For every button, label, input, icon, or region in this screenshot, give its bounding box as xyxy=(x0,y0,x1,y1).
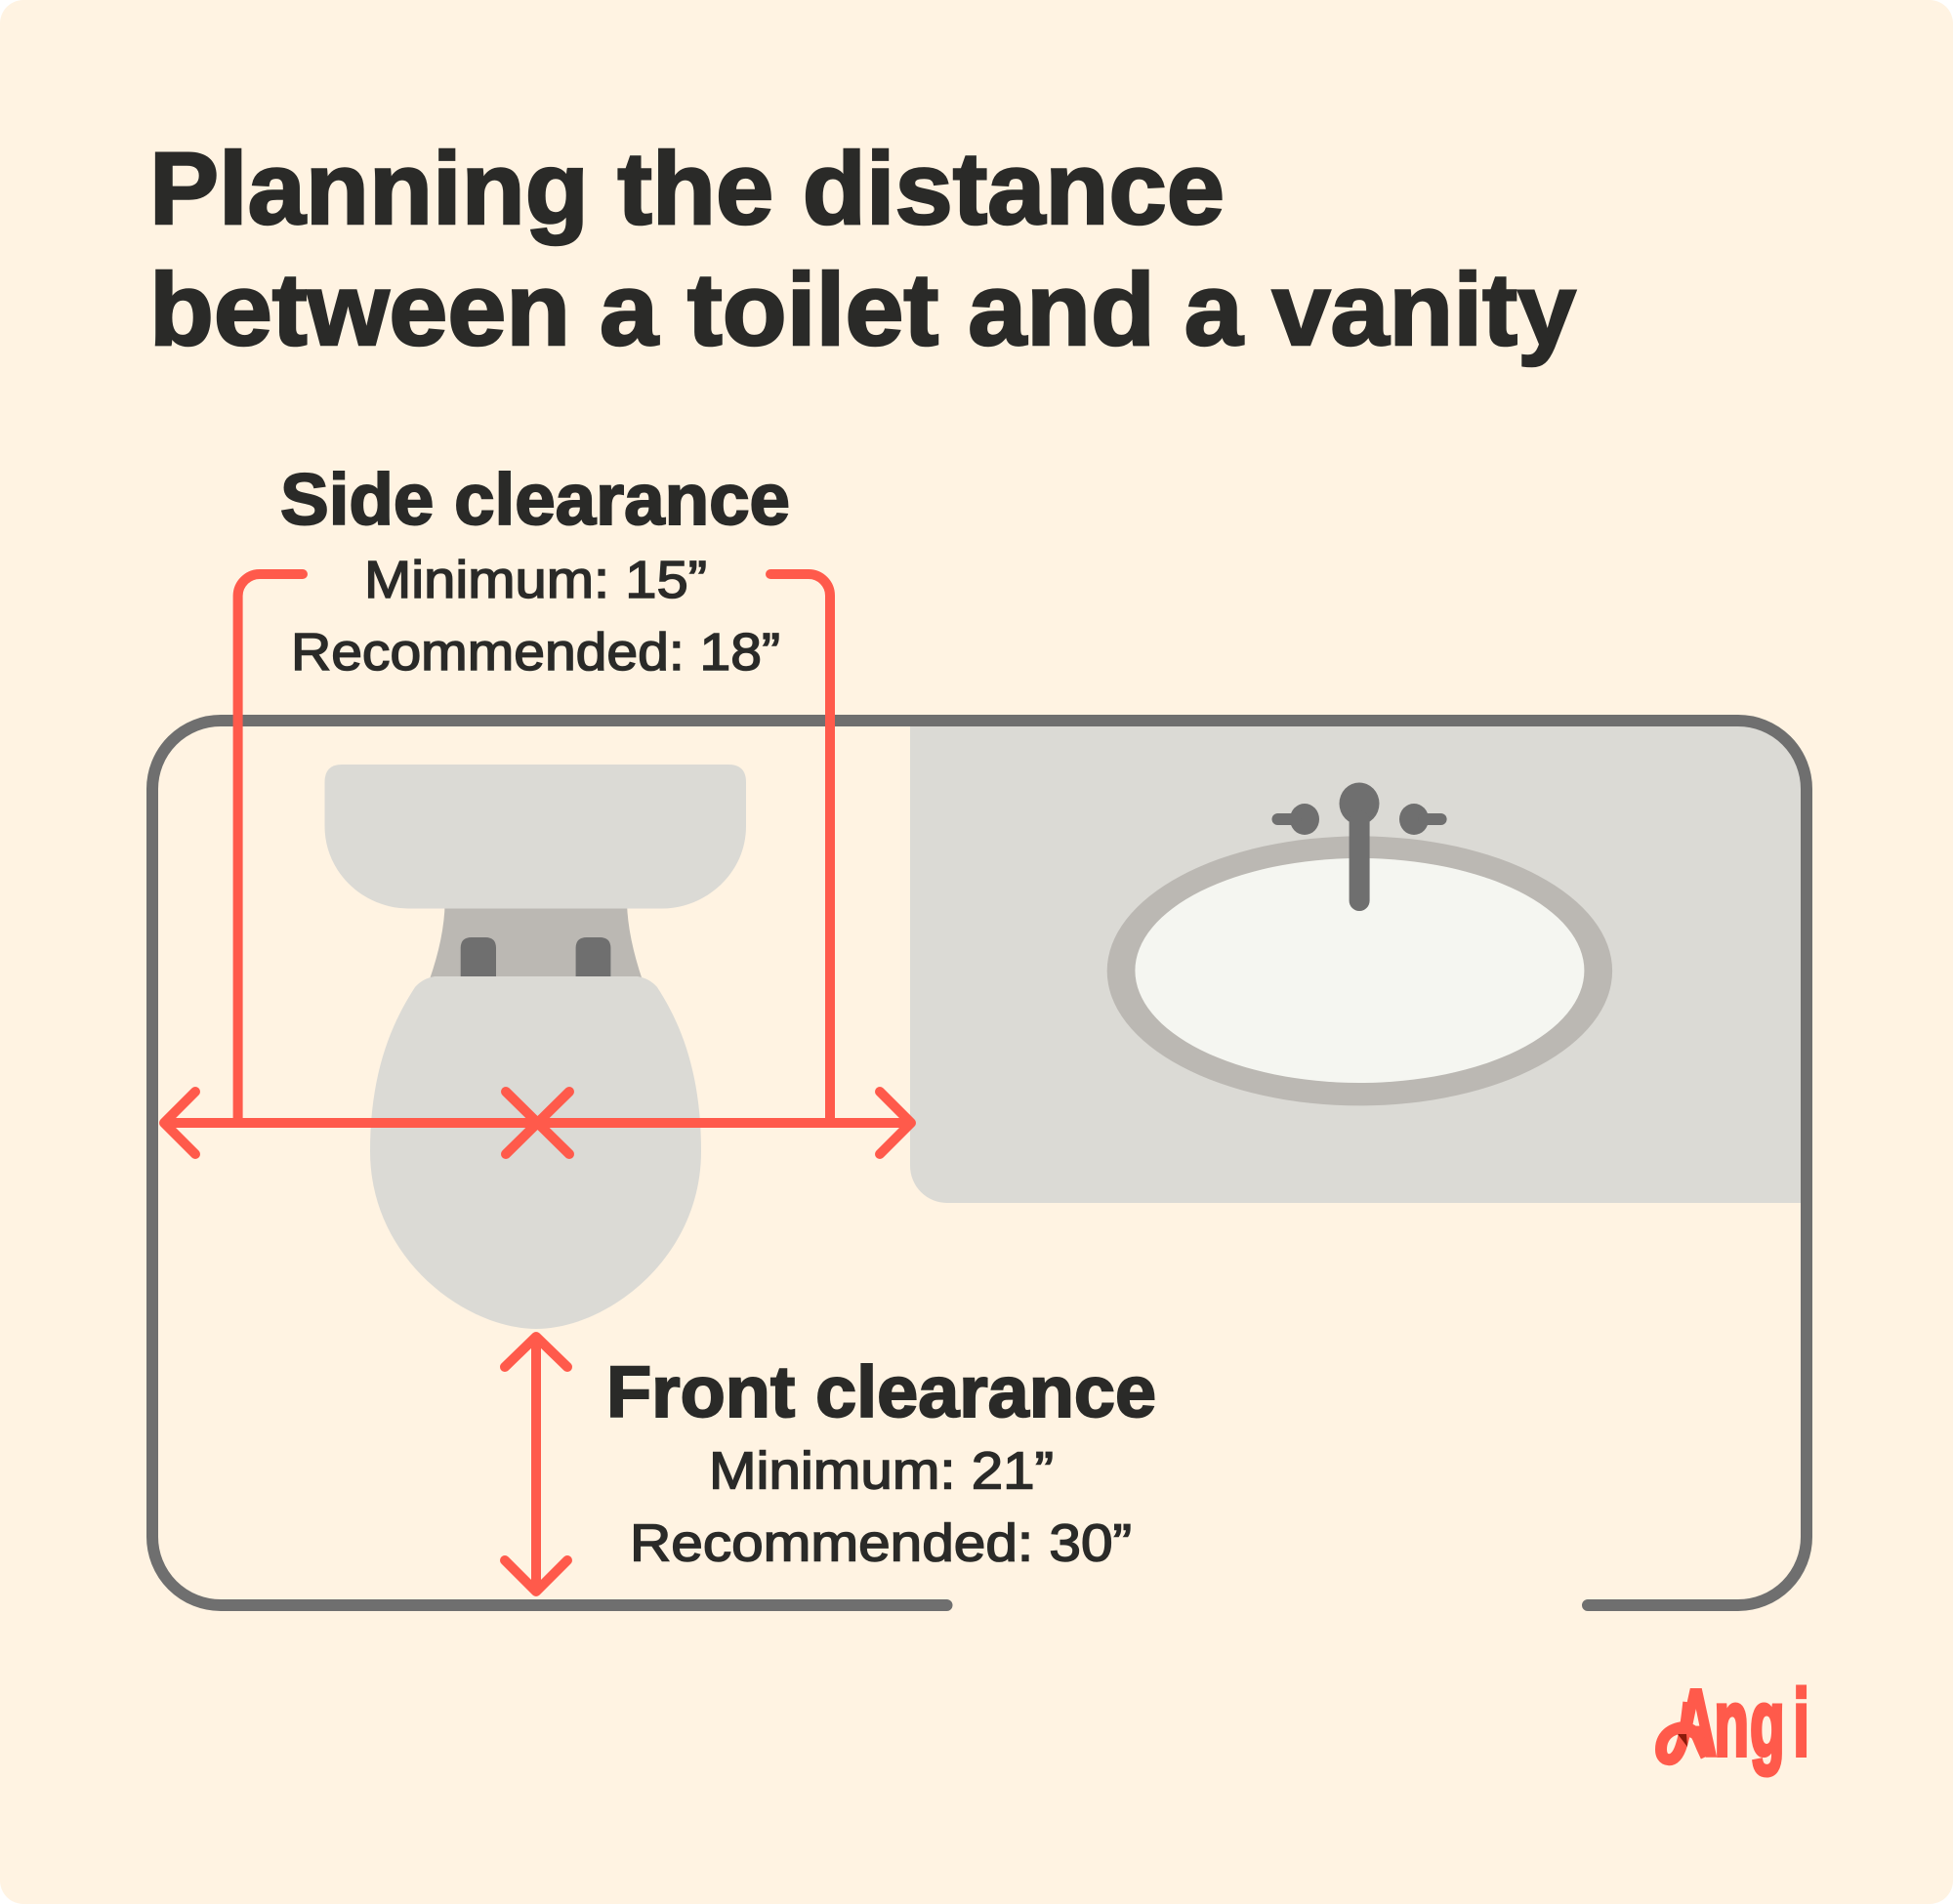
room outline with door gap xyxy=(152,721,1807,1605)
toilet tank xyxy=(324,765,746,908)
title: between a toilet and a vanity xyxy=(149,253,1576,367)
side clearance label xyxy=(280,459,790,682)
toilet xyxy=(324,765,746,1329)
front clearance arrow xyxy=(505,1337,567,1592)
vanity countertop xyxy=(910,721,1807,1203)
front clearance label: Minimum: 21” xyxy=(709,1441,1054,1500)
Angi logo: Angi xyxy=(1676,1670,1809,1775)
sink rim xyxy=(1107,836,1612,1105)
side clearance label: Side clearance xyxy=(280,459,790,540)
front clearance label xyxy=(606,1351,1156,1572)
toilet neck xyxy=(430,903,643,980)
toilet centerline cross xyxy=(506,1092,569,1154)
front clearance label: Recommended: 30” xyxy=(630,1513,1132,1572)
title: Planning the distance xyxy=(149,132,1225,246)
sink basin xyxy=(1135,858,1584,1083)
sink xyxy=(1107,783,1612,1105)
side clearance bracket xyxy=(238,574,830,1123)
side clearance label: Recommended: 18” xyxy=(291,623,780,682)
title xyxy=(149,132,1576,367)
side clearance label: Minimum: 15” xyxy=(364,551,707,609)
toilet hinges xyxy=(461,937,610,978)
side clearance arrow xyxy=(164,1092,911,1154)
toilet bowl xyxy=(370,976,701,1329)
faucet xyxy=(1271,783,1447,911)
front clearance label: Front clearance xyxy=(606,1351,1156,1432)
